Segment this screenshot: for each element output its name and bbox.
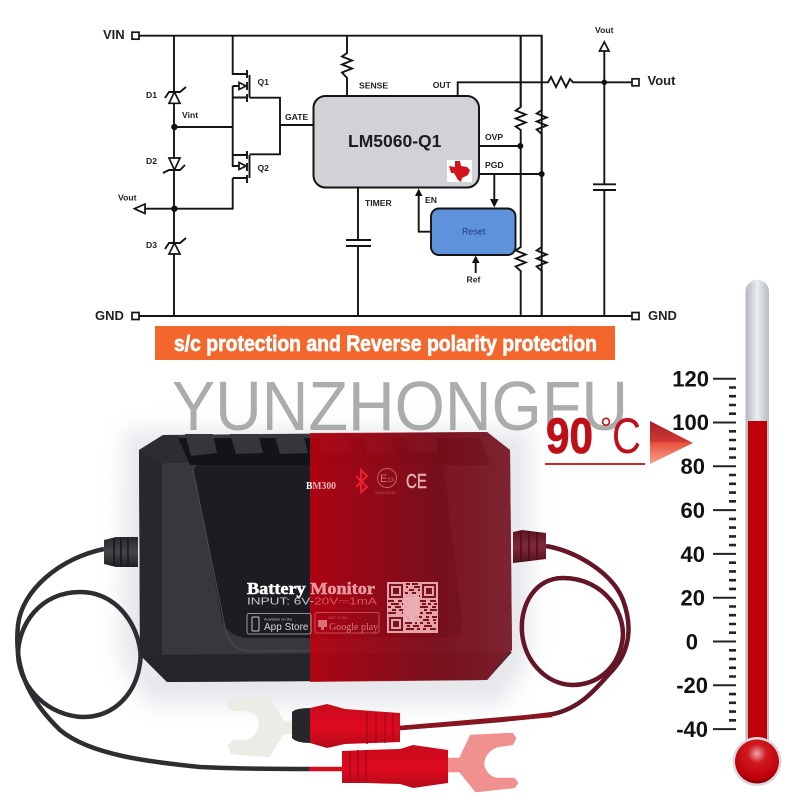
circuit diagram: [95, 25, 677, 323]
minor ticks: [729, 388, 736, 720]
white fork: [229, 698, 293, 756]
battery monitor device: [139, 432, 512, 682]
top recess: [178, 438, 490, 465]
callout arrow: [650, 421, 693, 464]
front panel: [194, 465, 462, 638]
OVP and PGD lines: [479, 132, 545, 208]
google play badge: [315, 612, 379, 633]
model name: BM300: [306, 480, 336, 492]
device shadow: [120, 430, 530, 705]
temperature labels: [672, 366, 709, 742]
diode column D1 D2 D3: D3: [146, 240, 157, 250]
temperature labels: 60: [681, 498, 705, 523]
bulb: [732, 737, 782, 786]
Ref arrow: [466, 256, 480, 284]
timer capacitor: TIMER: [365, 198, 393, 208]
side face: [139, 450, 162, 657]
red lead wire lower: [309, 767, 345, 771]
sense resistor: [342, 36, 388, 96]
upper corner face: [139, 435, 193, 463]
temperature labels: 0: [686, 630, 698, 654]
sense resistor: SENSE: [359, 80, 388, 90]
divider resistors: [516, 36, 547, 316]
lower band: [140, 652, 512, 682]
temperature labels: -40: [676, 717, 708, 742]
diode column D1 D2 D3: Vint: [182, 110, 198, 120]
bluetooth icon: [356, 470, 367, 492]
temperature labels: 120: [672, 366, 709, 392]
output column and capacitor: Vout: [595, 25, 614, 35]
dark red cable right: [400, 546, 629, 728]
QR code: [387, 582, 438, 633]
diode column D1 D2 D3: [146, 36, 198, 316]
glass tube: [746, 280, 769, 750]
product title: Battery Monitor: [247, 579, 375, 598]
device body: [139, 432, 512, 682]
temperature labels: 80: [681, 454, 705, 479]
panel rim: [193, 470, 465, 651]
Vout terminal right: Vout: [648, 73, 676, 88]
left cable grommet: [104, 537, 138, 567]
upper connector with fork: [229, 698, 552, 756]
EN arrow: EN: [425, 195, 437, 205]
lower connector with fork: [342, 734, 517, 791]
CE mark: CE: [406, 471, 427, 493]
black cable left: [17, 549, 310, 769]
EN arrow: [415, 188, 437, 232]
diode column D1 D2 D3: D2: [146, 156, 157, 166]
Vout node arrow: [118, 192, 174, 214]
red body: [342, 745, 448, 788]
temperature labels: 40: [681, 542, 705, 567]
right cable grommet: [513, 530, 546, 563]
GND terminal left: [95, 308, 139, 323]
red body: [310, 704, 400, 748]
Vout terminal right: [632, 73, 676, 88]
GND terminal left: GND: [95, 308, 124, 323]
red half overlay: [310, 432, 512, 682]
temperature labels: 20: [681, 586, 705, 610]
reset block: [431, 208, 516, 255]
E13 mark: E13: [380, 473, 395, 485]
power rails: [139, 36, 632, 316]
thermometer: [672, 280, 782, 786]
90 degree callout: 90: [546, 408, 593, 464]
MOSFETs Q1 and Q2: [174, 36, 313, 209]
google play badge: GET IT ON: [328, 616, 347, 620]
reset block: Reset: [462, 226, 486, 236]
google play badge: Google play: [329, 622, 378, 633]
protection banner: s/c protection and Reverse polarity protection: [174, 331, 597, 356]
app store badge: App Store: [264, 622, 309, 633]
E13 mark: [375, 468, 396, 495]
90 degree callout: C: [612, 408, 641, 464]
E13 mark: 118-0714419: [375, 491, 395, 495]
VIN terminal: [103, 27, 139, 42]
output line with resistor: OUT: [433, 80, 452, 90]
MOSFETs Q1 and Q2: Q2: [258, 163, 269, 173]
vents: [185, 433, 438, 456]
input spec: INPUT: 6V- 20V⎓1mA: [247, 596, 377, 608]
watermark: YUNZHONGFU: [172, 367, 628, 445]
black tip: [292, 708, 311, 743]
red wire upper: [400, 715, 552, 728]
temperature labels: 100: [672, 410, 709, 435]
MOSFETs Q1 and Q2: Q1: [258, 77, 269, 87]
pink fork: [448, 734, 517, 791]
output column and capacitor: [593, 25, 616, 316]
app store badge: Available on the: [264, 616, 293, 622]
Ref arrow: Ref: [466, 274, 480, 284]
diode column D1 D2 D3: D1: [146, 90, 157, 100]
mercury column: [748, 421, 767, 746]
temperature labels: -20: [676, 673, 708, 698]
LM5060-Q1 chip: LM5060-Q1: [348, 131, 442, 151]
major ticks: [713, 379, 736, 729]
GND terminal right: [632, 308, 677, 323]
OVP and PGD lines: PGD: [485, 160, 504, 170]
Vout node arrow: Vout: [118, 192, 137, 202]
90 degree callout: °: [600, 412, 612, 446]
MOSFETs Q1 and Q2: GATE: [285, 112, 309, 122]
app store badge: [247, 614, 311, 634]
GND terminal right: GND: [648, 308, 677, 323]
90 degree callout: [545, 408, 693, 465]
output line with resistor: [433, 77, 632, 96]
OVP and PGD lines: OVP: [485, 132, 503, 142]
timer capacitor: [346, 188, 393, 316]
LM5060-Q1 chip: [314, 96, 479, 188]
protection banner: [155, 326, 615, 360]
TI logo: [447, 160, 472, 182]
VIN terminal: VIN: [103, 27, 125, 42]
